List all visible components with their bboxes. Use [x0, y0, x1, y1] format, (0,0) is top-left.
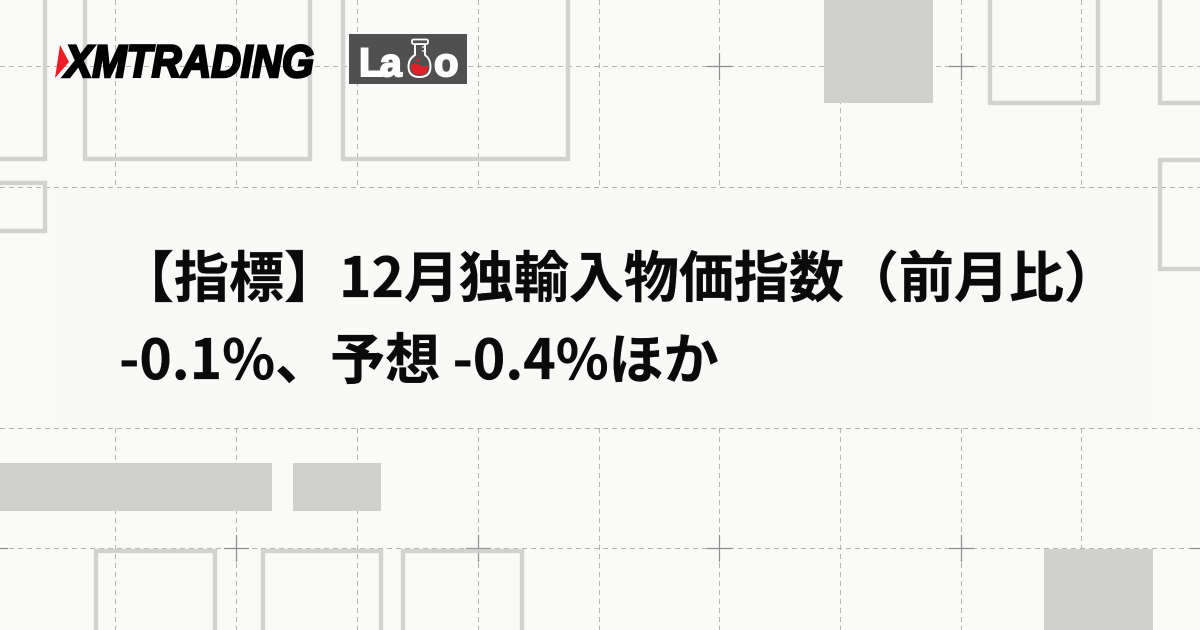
logo letters — [359, 41, 458, 85]
logo letters: o — [434, 41, 458, 84]
title line 2: -0.1%、予想 -0.4%ほか — [119, 315, 719, 395]
logo letters: a — [380, 42, 402, 84]
logo background — [349, 34, 467, 84]
title line 1: 【指標】12月独輸入物価指数（前月比） — [119, 233, 1119, 313]
icon: red arrowhead — [55, 45, 69, 78]
logo: Lab — [349, 34, 467, 84]
icon: flask — [408, 40, 430, 77]
logo letters: L — [359, 41, 383, 84]
logo: XMTRADING — [55, 36, 314, 85]
